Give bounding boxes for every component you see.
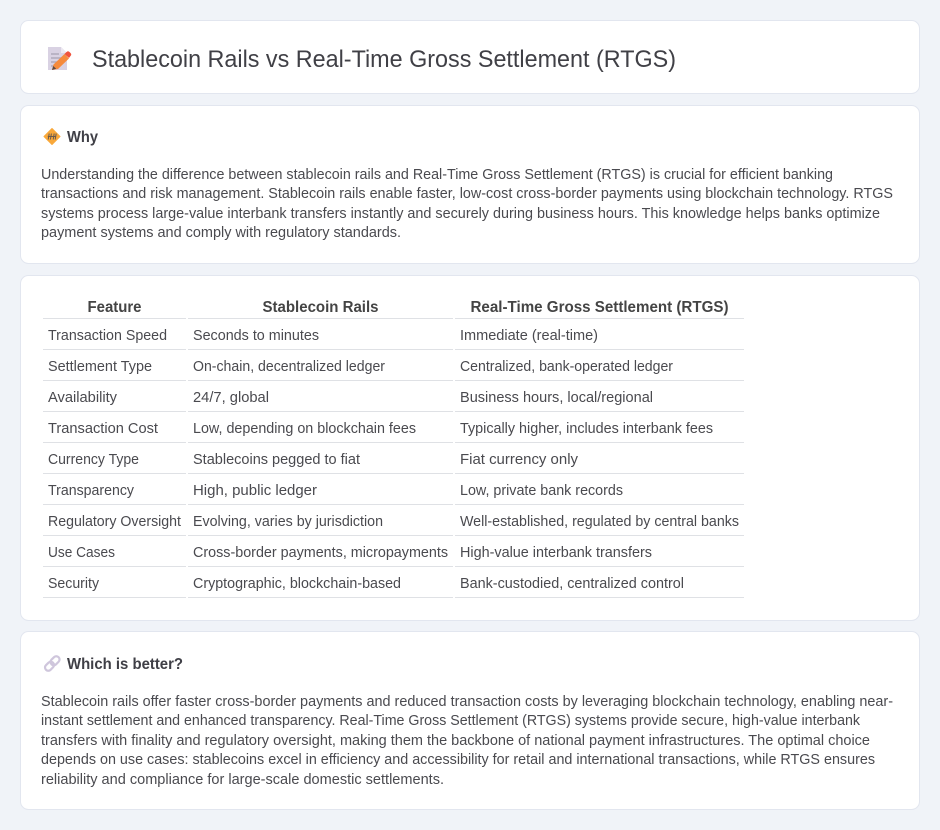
- row: availability: 24/7, global: [193, 390, 269, 406]
- row: transaction cost: [48, 421, 713, 437]
- text block: why paragraph: systems process large-value interbank transfers instantly and securely during business hours. This knowledge helps banks optimize: [41, 206, 880, 222]
- text block: why paragraph: transactions and risk management. Stablecoin rails enable faster, low-cost cross-border payments using blockchain technology. RTGS: [41, 186, 893, 202]
- row: use cases: High-value interbank transfers: [460, 545, 652, 561]
- row: transaction cost: Transaction Cost: [48, 421, 158, 437]
- row: settlement type: Centralized, bank-operated ledger: [460, 359, 673, 375]
- text block: which is better paragraph: depends on use cases: stablecoins excel in efficiency and accessibility for retail and international transactions, while RTGS ensures: [41, 752, 875, 768]
- row: transaction speed: Transaction Speed: [48, 328, 167, 344]
- text block: which is better paragraph: transfers with finality and regulatory oversight, making them the backbone of national payment infrastructures. The optimal choice: [41, 733, 870, 749]
- row: transaction speed: [48, 328, 598, 344]
- table header: Real-Time Gross Settlement (RTGS): [470, 299, 728, 316]
- row: use cases: [48, 545, 652, 561]
- row: currency type: Stablecoins pegged to fiat: [193, 452, 360, 468]
- row: regulatory oversight: Well-established, regulated by central banks: [460, 514, 739, 530]
- row: transaction speed: Seconds to minutes: [193, 328, 319, 344]
- panel: title header: [20, 20, 920, 94]
- row: use cases: Use Cases: [48, 545, 115, 561]
- row: security: [48, 576, 684, 592]
- row: regulatory oversight: Evolving, varies by jurisdiction: [193, 514, 383, 530]
- icon: memo with pencil: [48, 47, 71, 70]
- row: security: Security: [48, 576, 100, 592]
- text block: which is better paragraph: instant settlement and enhanced transparency. Real-Time Gross Settlement (RTGS) systems provide secure, high-value interbank: [41, 713, 861, 729]
- row: transparency: Low, private bank records: [460, 483, 623, 499]
- row: settlement type: [48, 359, 673, 375]
- text block: which is better paragraph: reliability and compliance for large-scale domestic settlements.: [41, 772, 444, 788]
- table header: Stablecoin Rails: [262, 299, 379, 316]
- icon: link: [44, 655, 61, 672]
- text block: which is better paragraph: Stablecoin rails offer faster cross-border payments and reduced transaction costs by leveraging blockchain technology, enabling near-: [41, 694, 893, 710]
- row: settlement type: On-chain, decentralized ledger: [193, 359, 385, 375]
- row: availability: Availability: [48, 390, 118, 406]
- panel: which is better: [20, 632, 920, 810]
- row: transparency: [48, 483, 623, 499]
- row: use cases: Cross-border payments, micropayments: [193, 545, 448, 561]
- heading: which is better: Which is better?: [67, 656, 183, 673]
- icon: warning diamond: [44, 128, 60, 144]
- text block: why paragraph: Understanding the difference between stablecoin rails and Real-Time Gross Settlement (RTGS) is crucial for efficient banking: [41, 167, 833, 183]
- row: availability: [48, 390, 653, 406]
- row: currency type: [48, 452, 579, 468]
- row: transparency: High, public ledger: [193, 483, 317, 499]
- text block: why paragraph: payment systems and comply with regulatory standards.: [41, 225, 401, 241]
- row: currency type: Currency Type: [48, 452, 139, 468]
- panel: why: [20, 106, 920, 264]
- row: transaction cost: Low, depending on blockchain fees: [193, 421, 416, 437]
- heading: why: Why: [67, 129, 98, 146]
- text block: which is better paragraph: [41, 694, 893, 788]
- text block: why paragraph: [41, 167, 893, 241]
- table header: [88, 299, 728, 316]
- row: transaction speed: Immediate (real-time): [460, 328, 598, 344]
- panel: comparison table: [20, 276, 920, 620]
- title: Stablecoin Rails vs Real-Time Gross Settlement (RTGS): [92, 46, 676, 73]
- row: security: Cryptographic, blockchain-based: [193, 576, 401, 592]
- row: transaction cost: Typically higher, includes interbank fees: [460, 421, 713, 437]
- row: regulatory oversight: [48, 514, 739, 530]
- table header: Feature: [88, 299, 142, 316]
- row: availability: Business hours, local/regional: [460, 390, 653, 406]
- row: security: Bank-custodied, centralized control: [460, 576, 684, 592]
- row: regulatory oversight: Regulatory Oversight: [48, 514, 181, 530]
- row: settlement type: Settlement Type: [48, 359, 152, 375]
- row: currency type: Fiat currency only: [460, 452, 579, 468]
- row: transparency: Transparency: [48, 483, 135, 499]
